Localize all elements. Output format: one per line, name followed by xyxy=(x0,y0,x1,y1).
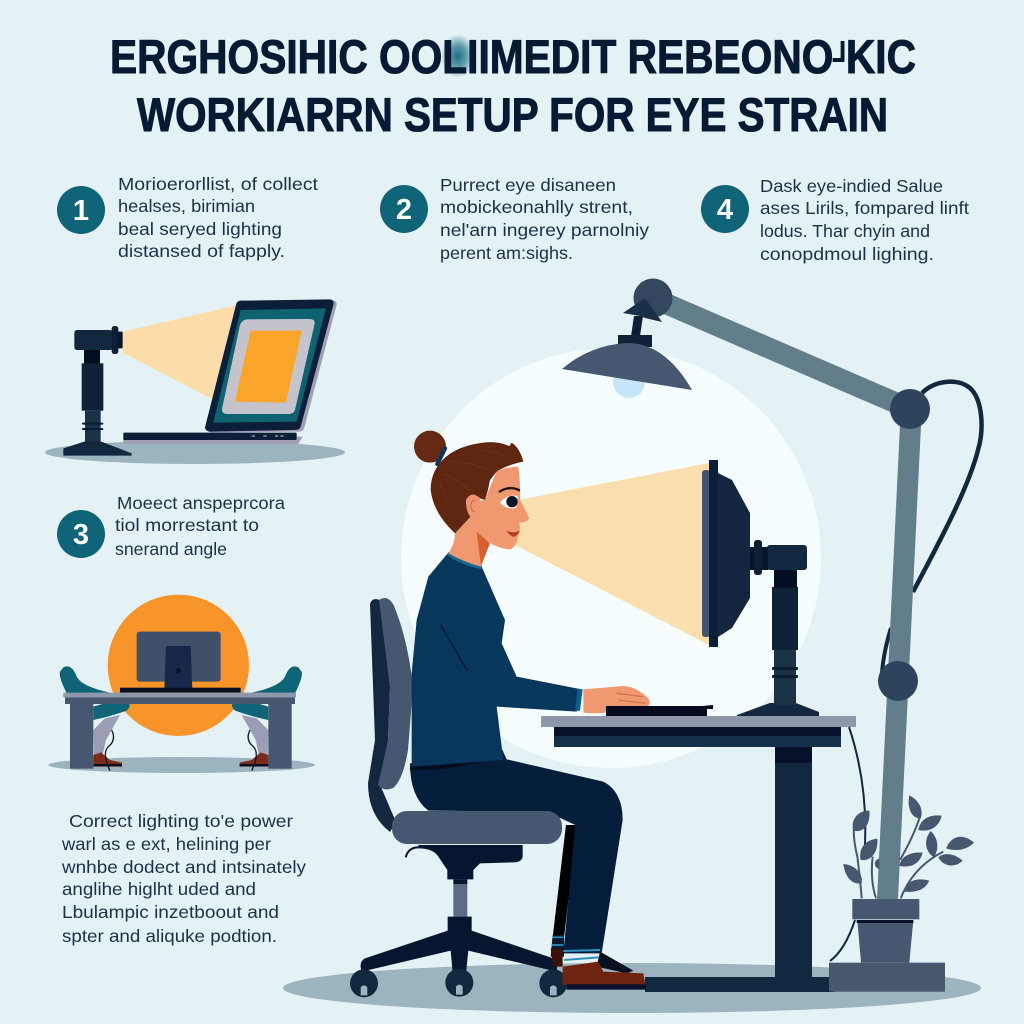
step 1: healses, birimian xyxy=(118,196,255,216)
lower text block: anglihe higlht uded and xyxy=(62,879,256,899)
legs and shoes xyxy=(410,750,646,990)
step 2: perent am:sighs. xyxy=(440,243,573,263)
step 4: Dask eye-indied Salue xyxy=(760,176,943,196)
lower text block: spter and aliquke podtion. xyxy=(62,926,277,946)
step 3 xyxy=(57,493,285,559)
title xyxy=(110,30,916,141)
step 4: ases Lirils, fompared linft xyxy=(760,198,969,218)
step 2: 2 xyxy=(396,194,412,226)
lower text block: Lbulampic inzetboout and xyxy=(62,902,279,922)
step 4: lodus. Thar chyin and xyxy=(760,221,930,241)
step 1: Morioerorllist, of collect xyxy=(118,174,318,194)
step 4 xyxy=(701,176,969,264)
step 3: tiol morrestant to xyxy=(115,515,259,535)
office chair xyxy=(350,598,567,997)
lower text block xyxy=(61,811,306,946)
title: ERGHOSIHIC OOLIIMEDIT REBEONO xyxy=(110,30,946,83)
monitor on stand xyxy=(702,460,819,716)
cable xyxy=(830,727,865,961)
icon: desk front view with monitor xyxy=(48,595,315,773)
lower text block: warl as e ext, helining per xyxy=(61,834,271,854)
glow circle behind workstation xyxy=(401,348,821,768)
step 3: 3 xyxy=(73,519,89,551)
step 1 xyxy=(57,174,318,261)
title: WORKIARRN SETUP FOR EYE STRAIN xyxy=(137,88,888,141)
light beam from eye to monitor xyxy=(515,463,709,645)
floor lamp xyxy=(562,278,982,899)
step 2: Purrect eye disaneen xyxy=(440,175,616,195)
title: ⅃ xyxy=(833,37,846,67)
step 3: Moeect anspeprcora xyxy=(117,493,285,513)
step 2: mobickeonahlly strent, xyxy=(440,197,633,217)
potted plant xyxy=(829,795,974,992)
lower text block: wnhbe dodect and intsinately xyxy=(61,857,306,877)
step 4: conopdmoul lighing. xyxy=(760,244,934,264)
lower text block: Correct lighting to'e power xyxy=(69,811,293,831)
desk xyxy=(541,716,856,992)
step 3: snerand angle xyxy=(115,539,227,559)
step 2 xyxy=(380,175,649,263)
step 4: 4 xyxy=(717,194,733,226)
person xyxy=(392,431,650,990)
floor shadow xyxy=(283,963,981,1013)
step 2: nel'arn ingerey parnolniy xyxy=(440,220,649,240)
keyboard under hand xyxy=(606,705,713,716)
torso, head and arm xyxy=(412,431,650,767)
step 1: beal seryed lighting xyxy=(118,219,282,239)
step 1: distansed of fapply. xyxy=(118,241,285,261)
seat cushion xyxy=(392,811,562,844)
icon: camera aimed at laptop xyxy=(45,299,345,464)
step 1: 1 xyxy=(73,195,89,227)
title: KIC xyxy=(846,30,916,83)
